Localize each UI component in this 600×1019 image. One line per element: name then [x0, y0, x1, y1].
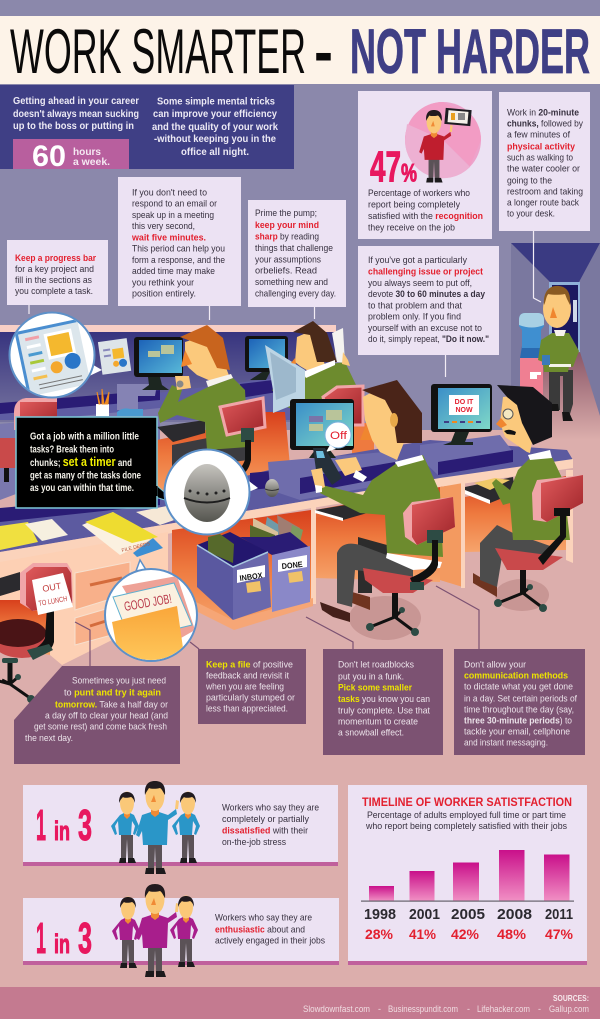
- tip: keep a file: feedback and revisit it: [206, 670, 289, 680]
- tip: punt: Sometimes you just need: [72, 674, 166, 686]
- monitor: [134, 337, 183, 390]
- tip: communication methods: communication methods: [464, 670, 568, 680]
- tip: challenging issue: do it, simply repeat, "Do it now.": [368, 333, 489, 344]
- stat panel: dissatisfied: [23, 781, 338, 874]
- tip: 20-minute chunks: physical activity: [507, 140, 576, 152]
- face: [363, 385, 405, 460]
- tip: 20-minute chunks: a few minutes of: [507, 128, 570, 140]
- tip: progress bar: you complete a task.: [15, 285, 93, 296]
- main desk: [0, 440, 573, 564]
- tip: keep a file: particularly stumped or: [206, 692, 295, 702]
- black tip box: [16, 417, 178, 508]
- inbox and done boxes: [197, 515, 310, 620]
- footer sources: -: [538, 1004, 541, 1014]
- stat panel: 47 percent recognition: [358, 91, 492, 239]
- tip: communication methods: in a day. Set certain periods of: [464, 692, 577, 704]
- progress bar bubble: [10, 312, 102, 398]
- tip: roadblocks: [323, 649, 443, 755]
- bar chart: 2011: [545, 906, 573, 923]
- front monitor stand and desk: [268, 452, 398, 500]
- intro panel: -without keeping you in the: [154, 134, 276, 145]
- figures in magenta: [112, 884, 198, 977]
- timeline heading: TIMELINE OF WORKER SATISTFACTION: [362, 795, 572, 809]
- tip: keep your mind sharp: things that challenge: [255, 242, 333, 253]
- chair: [323, 386, 363, 425]
- tip: 20-minute chunks: the water cooler or: [507, 162, 580, 174]
- bar chart: 2005: [451, 906, 485, 923]
- 60 hours callout: 60: [32, 140, 66, 173]
- tip: challenging issue: you always seem to put off,: [368, 277, 472, 288]
- tip: progress bar: for a key project and: [15, 263, 94, 274]
- tip: roadblocks: a snowball effect.: [338, 726, 404, 738]
- intro panel: can improve your efficiency: [153, 109, 277, 120]
- seat: [495, 548, 563, 570]
- tip: keep your mind sharp: keep your mind: [255, 219, 319, 230]
- tip: 20-minute chunks: a longer route back: [507, 196, 579, 208]
- bar chart: 1998: [364, 906, 396, 923]
- intro panel: [0, 85, 294, 173]
- tip: 20-minute chunks: chunks, followed by: [507, 118, 583, 128]
- tip: 20-minute chunks: [499, 92, 590, 231]
- file folder: [82, 512, 163, 557]
- chair: [220, 398, 265, 474]
- tip: communication methods: [454, 649, 585, 755]
- tip: communication methods: tackle your email, cellphone: [464, 726, 570, 736]
- tip: wait five minutes: you rethink your: [132, 276, 194, 288]
- front monitor with off bubble: [290, 399, 354, 458]
- timeline panel: Percentage of adults employed full time or part time: [367, 809, 566, 820]
- footer sources: -: [467, 1004, 470, 1014]
- pencil cup: [96, 389, 109, 416]
- bar chart: 28%: [365, 926, 394, 942]
- bar chart: 2001: [409, 906, 440, 923]
- keyboard: [315, 498, 388, 520]
- hallway: [511, 243, 600, 440]
- seat: [363, 568, 433, 593]
- left drawer pedestal: [0, 532, 168, 665]
- tip: 20-minute chunks: to your desk.: [507, 208, 555, 218]
- tip: punt: get some rest) and come back fresh: [34, 720, 167, 732]
- tip: challenging issue: challenging issue or project: [368, 266, 483, 276]
- tip: 20-minute chunks: restroom and taking: [507, 186, 583, 196]
- footer sources: Gallup.com: [549, 1004, 589, 1014]
- tip: keep your mind sharp: your assumptions: [255, 254, 321, 264]
- black tip box: as you can within that time.: [30, 483, 134, 494]
- tip: 20-minute chunks: Work in 20-minute: [507, 106, 579, 118]
- callout leader lines: [29, 305, 446, 377]
- good job bubble: [105, 560, 197, 665]
- tip: keep your mind sharp: something new and: [255, 276, 328, 287]
- tip: challenging issue: [358, 246, 499, 355]
- stat panel: enthusiastic: in: [54, 929, 70, 959]
- tip: roadblocks: tasks you know you can: [338, 693, 430, 704]
- stat panel: enthusiastic: 3: [78, 914, 92, 963]
- stat panel: 47 percent recognition: Percentage of workers who: [368, 187, 470, 198]
- newspaper: [265, 345, 305, 413]
- 60 hours callout: a week.: [73, 157, 110, 168]
- bar chart: 41%: [409, 926, 437, 942]
- legs: [358, 537, 387, 593]
- black tip box: Got a job with a million little: [30, 432, 139, 442]
- black tip box: tasks? Break them into: [30, 444, 114, 456]
- tip: keep a file: when you are feeling: [205, 680, 284, 692]
- intro panel: Getting ahead in your career: [13, 96, 139, 107]
- tip: roadblocks: Pick some smaller: [338, 682, 412, 692]
- do it now sign: DO IT: [455, 399, 474, 406]
- tip: wait five minutes: speak up in a meeting: [132, 209, 214, 220]
- bar chart: 42%: [451, 926, 480, 942]
- file folder: FILE DEEDS: [121, 541, 151, 554]
- tip: progress bar: Keep a progress bar: [15, 252, 96, 263]
- tip: keep your mind sharp: [248, 200, 346, 307]
- tip: wait five minutes: wait five minutes.: [131, 232, 206, 242]
- tip: wait five minutes: This period can help you: [132, 242, 225, 254]
- intro panel: Some simple mental tricks: [157, 96, 275, 108]
- stat panel: enthusiastic: [23, 884, 339, 977]
- tip: 20-minute chunks: going to the: [507, 174, 552, 186]
- black tip box: chunks; set a timer and: [30, 454, 132, 469]
- back left chair: [14, 398, 57, 430]
- tip: wait five minutes: If you don't need to: [132, 186, 207, 198]
- bar chart: [361, 850, 574, 942]
- out to lunch note: OUT: [42, 581, 63, 594]
- keyboard: [465, 477, 515, 503]
- tip: challenging issue: If you've got a particularly: [368, 254, 467, 265]
- figures in blue: [111, 781, 200, 874]
- stat panel: dissatisfied: dissatisfied with their: [222, 824, 308, 836]
- stat panel: dissatisfied: in: [54, 816, 70, 846]
- stat panel: enthusiastic: actively engaged in their jobs: [215, 934, 325, 946]
- front worker: [311, 380, 455, 640]
- water cooler: [519, 313, 544, 428]
- stapler: [117, 408, 143, 416]
- stat panel: dissatisfied: 3: [78, 801, 92, 850]
- good job bubble: GOOD JOB!: [123, 591, 173, 614]
- tip: challenging issue: devote 30 to 60 minutes a day: [368, 288, 486, 299]
- tip: roadblocks: Don't let roadblocks: [338, 658, 414, 670]
- back wall and back desks: [0, 325, 374, 500]
- timeline panel: [348, 785, 587, 965]
- timer bubble: [164, 450, 258, 534]
- tip: punt: tomorrow. Take a half day or: [55, 698, 168, 710]
- tip: keep your mind sharp: challenging every day.: [255, 288, 336, 298]
- black tip box: get as many of the tasks done: [30, 470, 141, 482]
- tip: wait five minutes: added time may make: [132, 265, 215, 276]
- done label: DONE: [281, 560, 304, 571]
- face: [500, 395, 535, 453]
- hands and phone: [311, 448, 367, 493]
- out to lunch note: [32, 573, 73, 615]
- legs: [473, 573, 497, 597]
- figure: [419, 110, 453, 183]
- footer sources: SOURCES:: [553, 993, 589, 1003]
- bar chart: 2008: [497, 906, 532, 923]
- tip: punt: [14, 666, 180, 764]
- do it now monitor: [420, 384, 513, 475]
- 60 hours callout: [13, 139, 129, 173]
- tip: wait five minutes: form a response, and the: [132, 254, 225, 265]
- tip: challenging issue: yourself with an excuse not to: [368, 322, 482, 333]
- tip: keep a file: Keep a file of positive: [206, 658, 293, 670]
- tip: keep your mind sharp: orbeliefs. Read: [255, 264, 317, 276]
- inbox label: INBOX: [239, 571, 264, 583]
- tip: communication methods: and instant messaging.: [464, 736, 548, 748]
- torso: [492, 457, 570, 540]
- tip: punt: the next day.: [25, 732, 73, 743]
- bar chart: 47%: [545, 926, 574, 942]
- tip: communication methods: Don't allow your: [464, 658, 526, 670]
- sign: [444, 108, 472, 126]
- tip: keep your mind sharp: Prime the pump;: [255, 207, 317, 218]
- tip: wait five minutes: position entirely.: [132, 288, 196, 298]
- tip: wait five minutes: respond to an email or: [132, 198, 217, 208]
- do it now sign: [449, 395, 479, 415]
- stat panel: enthusiastic: 1: [36, 914, 46, 963]
- tip: keep a file: [198, 649, 306, 724]
- title banner: WORK SMARTER: [10, 17, 306, 87]
- tip: wait five minutes: [118, 177, 241, 306]
- stat panel: 47 percent recognition: 47: [370, 142, 401, 192]
- tip: communication methods: time throughout the day (say,: [464, 704, 574, 714]
- stat panel: enthusiastic: Workers who say they are: [215, 912, 312, 922]
- desk papers: [0, 505, 180, 550]
- out to lunch note: TO LUNCH: [38, 594, 68, 608]
- stat panel: dissatisfied: Workers who say they are: [222, 802, 319, 812]
- intro panel: doesn't always mean sucking: [13, 109, 139, 120]
- intro panel: and the quality of your work: [152, 122, 278, 133]
- tip: communication methods: to dictate what you get done: [464, 680, 573, 692]
- chair: [403, 497, 455, 545]
- footer sources: Businesspundit.com: [388, 1004, 458, 1014]
- tip: keep your mind sharp: sharp by reading: [255, 230, 319, 242]
- do it now sign: NOW: [455, 407, 473, 414]
- bar chart: 48%: [497, 926, 527, 942]
- footer sources: Slowdownfast.com: [303, 1004, 370, 1014]
- tip: challenging issue: to that problem and that: [368, 300, 462, 310]
- tip: progress bar: [7, 240, 108, 305]
- swivel base: [392, 592, 398, 618]
- intro panel: up to the boss or putting in: [13, 121, 134, 132]
- footer sources: [0, 987, 600, 1019]
- torso: [320, 455, 443, 557]
- tip: 20-minute chunks: such as walking to: [507, 152, 573, 162]
- 60 hours callout: hours: [73, 147, 101, 158]
- small progress document: [98, 338, 131, 375]
- swivel base: [520, 570, 526, 594]
- stat panel: 47 percent recognition: they receive on the job: [368, 222, 455, 232]
- tip: communication methods: three 30-minute periods) to: [464, 714, 572, 726]
- stat panel: dissatisfied: on-the-job stress: [222, 836, 286, 847]
- timer on desk: [265, 479, 279, 497]
- stat panel: 47 percent recognition: satisfied with the recognition: [368, 210, 483, 221]
- stat panel: 47 percent recognition: %: [401, 160, 417, 188]
- tip: progress bar: fill in the sections as: [15, 274, 92, 285]
- reading worker: [245, 321, 363, 425]
- out to lunch chair: [0, 563, 73, 703]
- desk orange panels: [170, 470, 573, 630]
- intro panel: office all night.: [181, 147, 249, 158]
- off bubble: Off: [330, 430, 348, 442]
- kitchen timer: [184, 464, 230, 522]
- stat panel: enthusiastic: enthusiastic about and: [215, 924, 305, 934]
- tip: wait five minutes: this very second,: [132, 220, 195, 231]
- timeline panel: who report being completely satisfied with their jobs: [365, 820, 567, 831]
- stat panel: dissatisfied: completely or partially: [222, 813, 309, 824]
- footer sources: -: [378, 1004, 381, 1014]
- stat panel: dissatisfied: 1: [36, 801, 46, 850]
- footer sources: Lifehacker.com: [477, 1004, 530, 1014]
- tip: punt: a day off to clear your head (and: [45, 710, 168, 720]
- chair: [532, 475, 583, 522]
- tip: roadblocks: momentum to create: [338, 716, 418, 726]
- stat panel: 47 percent recognition: report being completely: [368, 198, 460, 210]
- tip: roadblocks: truly complete. Use that: [338, 704, 430, 716]
- worker with wristwatch: [134, 325, 265, 474]
- tip: roadblocks: put you in a funk.: [338, 670, 404, 682]
- tip: challenging issue: problem only. If you find: [368, 310, 461, 322]
- right worker: [465, 385, 583, 612]
- pie circle: [405, 102, 481, 178]
- callout: water cooler pointer: [534, 231, 541, 302]
- floor: [0, 430, 600, 990]
- standing worker: [538, 286, 579, 421]
- tip: keep a file: less than appreciated.: [206, 702, 288, 714]
- title banner: -: [314, 17, 333, 87]
- floor shadow: [349, 596, 421, 640]
- tip: punt: to punt and try it again: [64, 686, 161, 698]
